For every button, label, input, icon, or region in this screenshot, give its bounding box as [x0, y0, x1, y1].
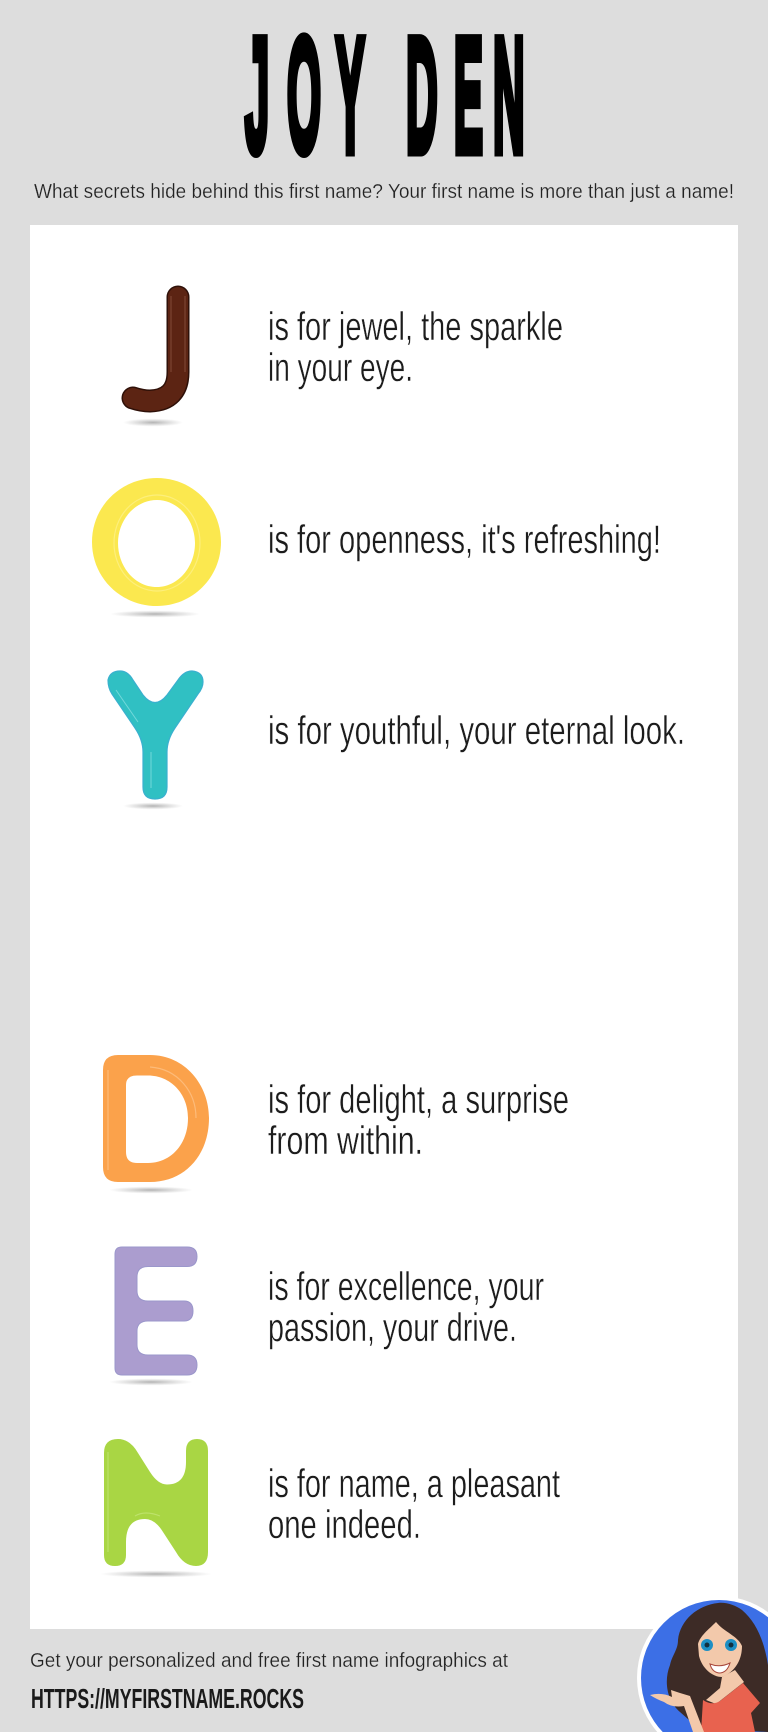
hair [667, 1603, 768, 1732]
shirt [701, 1683, 760, 1732]
letter row J [123, 296, 563, 426]
face [698, 1622, 742, 1677]
title: JOY DEN [245, 6, 525, 186]
letter row O [92, 478, 661, 618]
text: D lines: from within. [268, 1119, 423, 1163]
text: J line: is for jewel, the sparkle [268, 305, 563, 349]
text: N lines: is for name, a pleasant [268, 1462, 560, 1506]
icon: letter Y [108, 671, 203, 810]
eyes [701, 1639, 737, 1651]
subtitle: What secrets hide behind this first name? Your first name is more than just a name! [34, 180, 734, 203]
text: J line [268, 305, 563, 390]
footer text: Get your personalized and free first name infographics at [30, 1650, 508, 1672]
neck and chest [706, 1670, 744, 1704]
panel: letters [30, 225, 738, 1629]
icon: letter O [92, 478, 221, 618]
arm and hand [650, 1690, 704, 1732]
text: E lines: is for excellence, your [268, 1265, 544, 1309]
letter row E [109, 1247, 544, 1386]
letter row Y [108, 671, 685, 810]
footer url: HTTPS://MYFIRSTNAME.ROCKS [31, 1683, 304, 1714]
text: E lines [268, 1265, 544, 1350]
letter row N [100, 1439, 560, 1578]
icon: letter D [103, 1055, 209, 1194]
letter row D [103, 1055, 569, 1194]
icon: letter E [109, 1247, 197, 1386]
text: N lines: one indeed. [268, 1503, 421, 1547]
text: J line: in your eye. [268, 346, 413, 390]
text: D lines [268, 1078, 569, 1163]
text: N lines [268, 1462, 560, 1547]
icon: letter J [123, 296, 185, 426]
mouth [710, 1663, 730, 1673]
icon: letter N [100, 1439, 212, 1578]
avatar: woman in circle [637, 1596, 768, 1732]
text: E lines: passion, your drive. [268, 1306, 517, 1350]
text: D lines: is for delight, a surprise [268, 1078, 569, 1122]
